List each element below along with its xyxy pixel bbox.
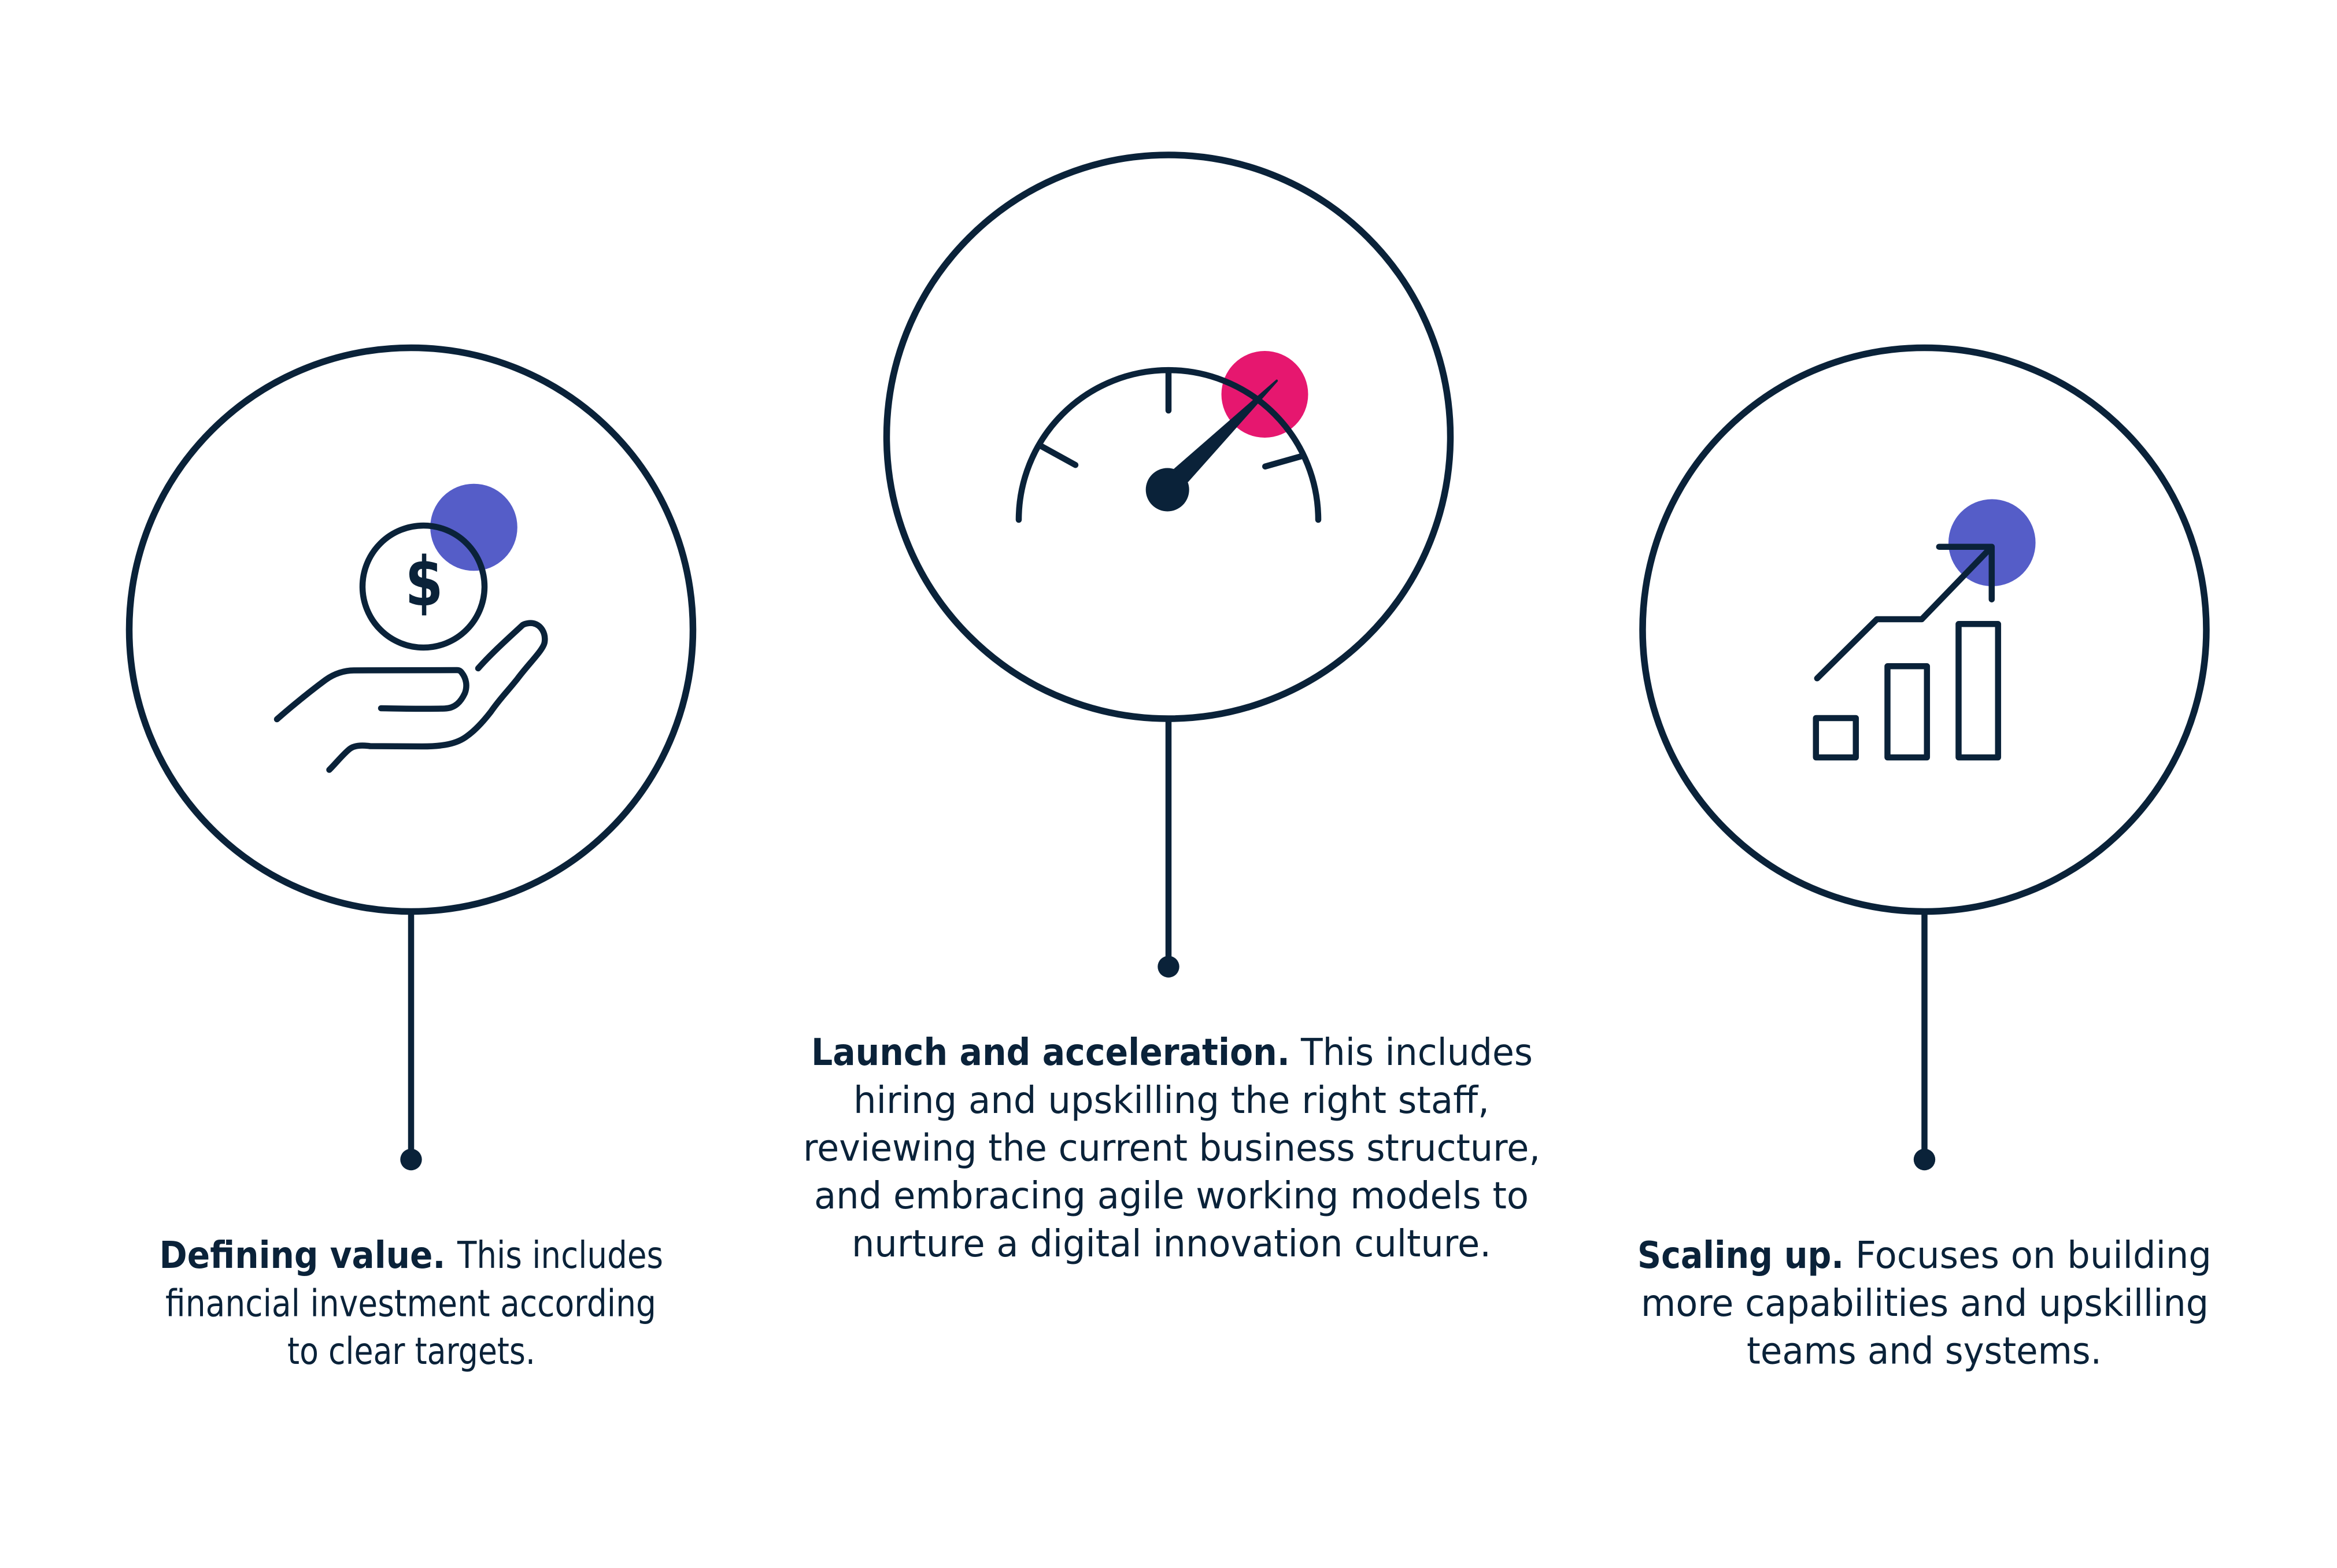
text: scaling up: teams and systems. bbox=[1747, 1330, 2102, 1373]
icon: hand holding dollar coin bbox=[277, 484, 545, 770]
text: defining value: financial investment according bbox=[165, 1282, 656, 1325]
text: scaling up: Scaling up. bbox=[1637, 1234, 1844, 1277]
text: launch and acceleration: Launch and acceleration. bbox=[811, 1031, 1290, 1074]
text: launch and acceleration: reviewing the current business structure, bbox=[803, 1127, 1540, 1170]
icon: speedometer gauge bbox=[1019, 351, 1318, 520]
connector line with end dot bbox=[400, 911, 422, 1170]
text: launch and acceleration bbox=[803, 1031, 1540, 1266]
text: launch and acceleration: hiring and upskilling the right staff, bbox=[853, 1079, 1489, 1122]
connector line with end dot bbox=[1158, 719, 1179, 978]
large circle outline bbox=[1643, 348, 2206, 911]
text: scaling up bbox=[1637, 1234, 2212, 1373]
text: launch and acceleration: This includes bbox=[1300, 1031, 1533, 1074]
text: defining value: This includes bbox=[457, 1234, 663, 1277]
panel: scaling up bbox=[1637, 348, 2212, 1373]
text: launch and acceleration: nurture a digital innovation culture. bbox=[852, 1223, 1491, 1266]
connector line with end dot bbox=[1914, 911, 1935, 1170]
icon: hand holding dollar coin: $ bbox=[405, 542, 443, 622]
icon: growth bar chart with arrow bbox=[1816, 499, 2036, 757]
text: defining value: Defining value. bbox=[160, 1234, 445, 1277]
text: defining value bbox=[160, 1234, 663, 1373]
panel: launch and acceleration bbox=[803, 155, 1540, 1266]
text: defining value: to clear targets. bbox=[287, 1330, 535, 1373]
large circle outline bbox=[130, 348, 693, 911]
text: scaling up: Focuses on building bbox=[1855, 1234, 2212, 1277]
large circle outline bbox=[887, 155, 1450, 719]
panel: defining value bbox=[130, 348, 693, 1373]
text: launch and acceleration: and embracing agile working models to bbox=[814, 1175, 1529, 1218]
text: scaling up: more capabilities and upskilling bbox=[1641, 1282, 2209, 1325]
